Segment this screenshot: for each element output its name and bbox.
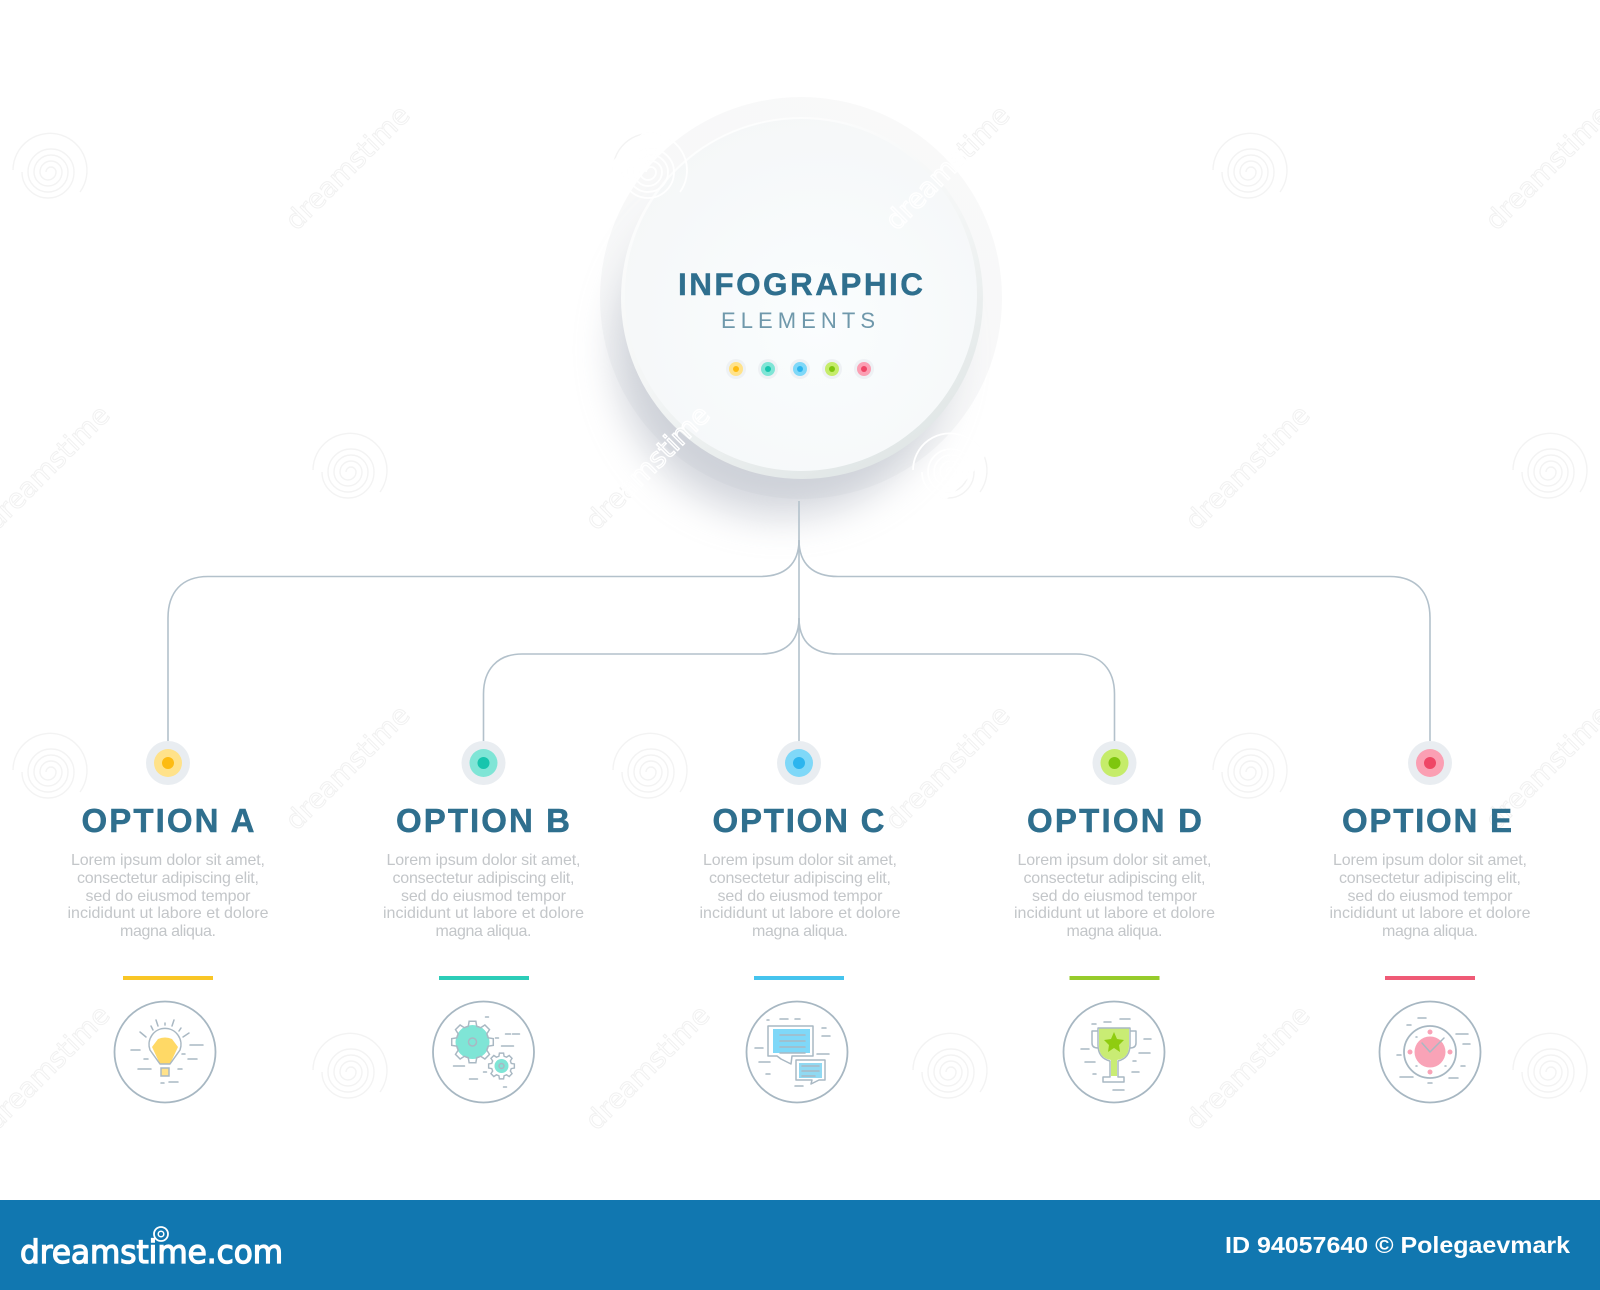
- icon: speech bubbles: [746, 1002, 848, 1102]
- panel: option B: [383, 741, 584, 1102]
- accent bar D: [1070, 976, 1160, 980]
- body text B: [383, 852, 584, 940]
- body text C: Lorem ipsum dolor sit amet,: [703, 852, 897, 869]
- body text C: magna aliqua.: [752, 923, 848, 940]
- accent bar A: [123, 976, 213, 980]
- body text E: sed do eiusmod tempor: [1348, 888, 1513, 905]
- heading A: OPTION A: [82, 802, 254, 839]
- icon: trophy: [1064, 1002, 1164, 1102]
- body text B: magna aliqua.: [436, 923, 532, 940]
- body text A: Lorem ipsum dolor sit amet,: [71, 852, 265, 869]
- body text E: incididunt ut labore et dolore: [1330, 905, 1531, 922]
- accent bar B: [439, 976, 529, 980]
- heading B: OPTION B: [396, 802, 570, 839]
- body text B: Lorem ipsum dolor sit amet,: [386, 852, 580, 869]
- background watermark: dreamstime: [1180, 1000, 1316, 1136]
- background watermark: dreamstime: [280, 100, 416, 236]
- background watermark: dreamstime: [580, 1000, 716, 1136]
- body text C: incididunt ut labore et dolore: [700, 905, 901, 922]
- node B: [462, 741, 506, 785]
- body text B: consectetur adipiscing elit,: [392, 870, 574, 887]
- heading E: OPTION E: [1342, 802, 1512, 839]
- watermark over central circle: dreamstime: [880, 100, 1016, 236]
- body text E: consectetur adipiscing elit,: [1339, 870, 1521, 887]
- footer logo: dreamstime.com: [20, 1233, 283, 1271]
- background watermark: dreamstime: [280, 700, 416, 836]
- heading D: OPTION D: [1027, 802, 1202, 839]
- watermark over central circle: dreamstime: [580, 400, 716, 536]
- body text A: consectetur adipiscing elit,: [77, 870, 259, 887]
- body text D: consectetur adipiscing elit,: [1024, 870, 1206, 887]
- body text D: [1014, 852, 1215, 940]
- panel: option C: [700, 741, 901, 1102]
- body text C: [700, 852, 901, 940]
- background watermark: dreamstime: [1180, 400, 1316, 536]
- footer credit: ID 94057640 © Polegaevmark: [1225, 1232, 1570, 1258]
- node A: [146, 741, 190, 785]
- icon: clock: [1380, 1002, 1480, 1102]
- body text D: sed do eiusmod tempor: [1032, 888, 1198, 905]
- panel: option D: [1014, 741, 1215, 1102]
- background watermark: dreamstime: [580, 400, 716, 536]
- body text C: consectetur adipiscing elit,: [709, 870, 891, 887]
- body text A: incididunt ut labore et dolore: [68, 905, 269, 922]
- watermark over central circle: [580, 100, 1016, 536]
- body text A: [68, 852, 269, 940]
- central subtitle: ELEMENTS: [721, 308, 875, 333]
- accent bar E: [1385, 976, 1475, 980]
- body text E: [1330, 852, 1531, 940]
- central circle: [600, 119, 992, 532]
- node E: [1408, 741, 1452, 785]
- icon: light bulb: [114, 1002, 216, 1102]
- body text A: sed do eiusmod tempor: [86, 888, 251, 905]
- node D: [1092, 741, 1136, 785]
- body text A: magna aliqua.: [120, 923, 216, 940]
- node C: [777, 741, 821, 785]
- central title: INFOGRAPHIC: [678, 266, 923, 302]
- color dots row: [726, 359, 874, 379]
- body text E: Lorem ipsum dolor sit amet,: [1333, 852, 1527, 869]
- body text B: incididunt ut labore et dolore: [383, 905, 584, 922]
- icon: gears: [433, 1002, 534, 1102]
- body text B: sed do eiusmod tempor: [401, 888, 567, 905]
- body text D: incididunt ut labore et dolore: [1014, 905, 1215, 922]
- panel: option A: [68, 741, 269, 1102]
- heading C: OPTION C: [712, 802, 884, 839]
- body text D: magna aliqua.: [1066, 923, 1162, 940]
- connector lines: [168, 501, 1430, 741]
- background watermark: dreamstime: [880, 700, 1016, 836]
- body text E: magna aliqua.: [1382, 923, 1478, 940]
- panel: option E: [1330, 741, 1531, 1102]
- accent bar C: [754, 976, 844, 980]
- body text C: sed do eiusmod tempor: [718, 888, 883, 905]
- footer bar: [0, 1200, 1600, 1290]
- background watermark: dreamstime: [880, 100, 1016, 236]
- body text D: Lorem ipsum dolor sit amet,: [1018, 852, 1212, 869]
